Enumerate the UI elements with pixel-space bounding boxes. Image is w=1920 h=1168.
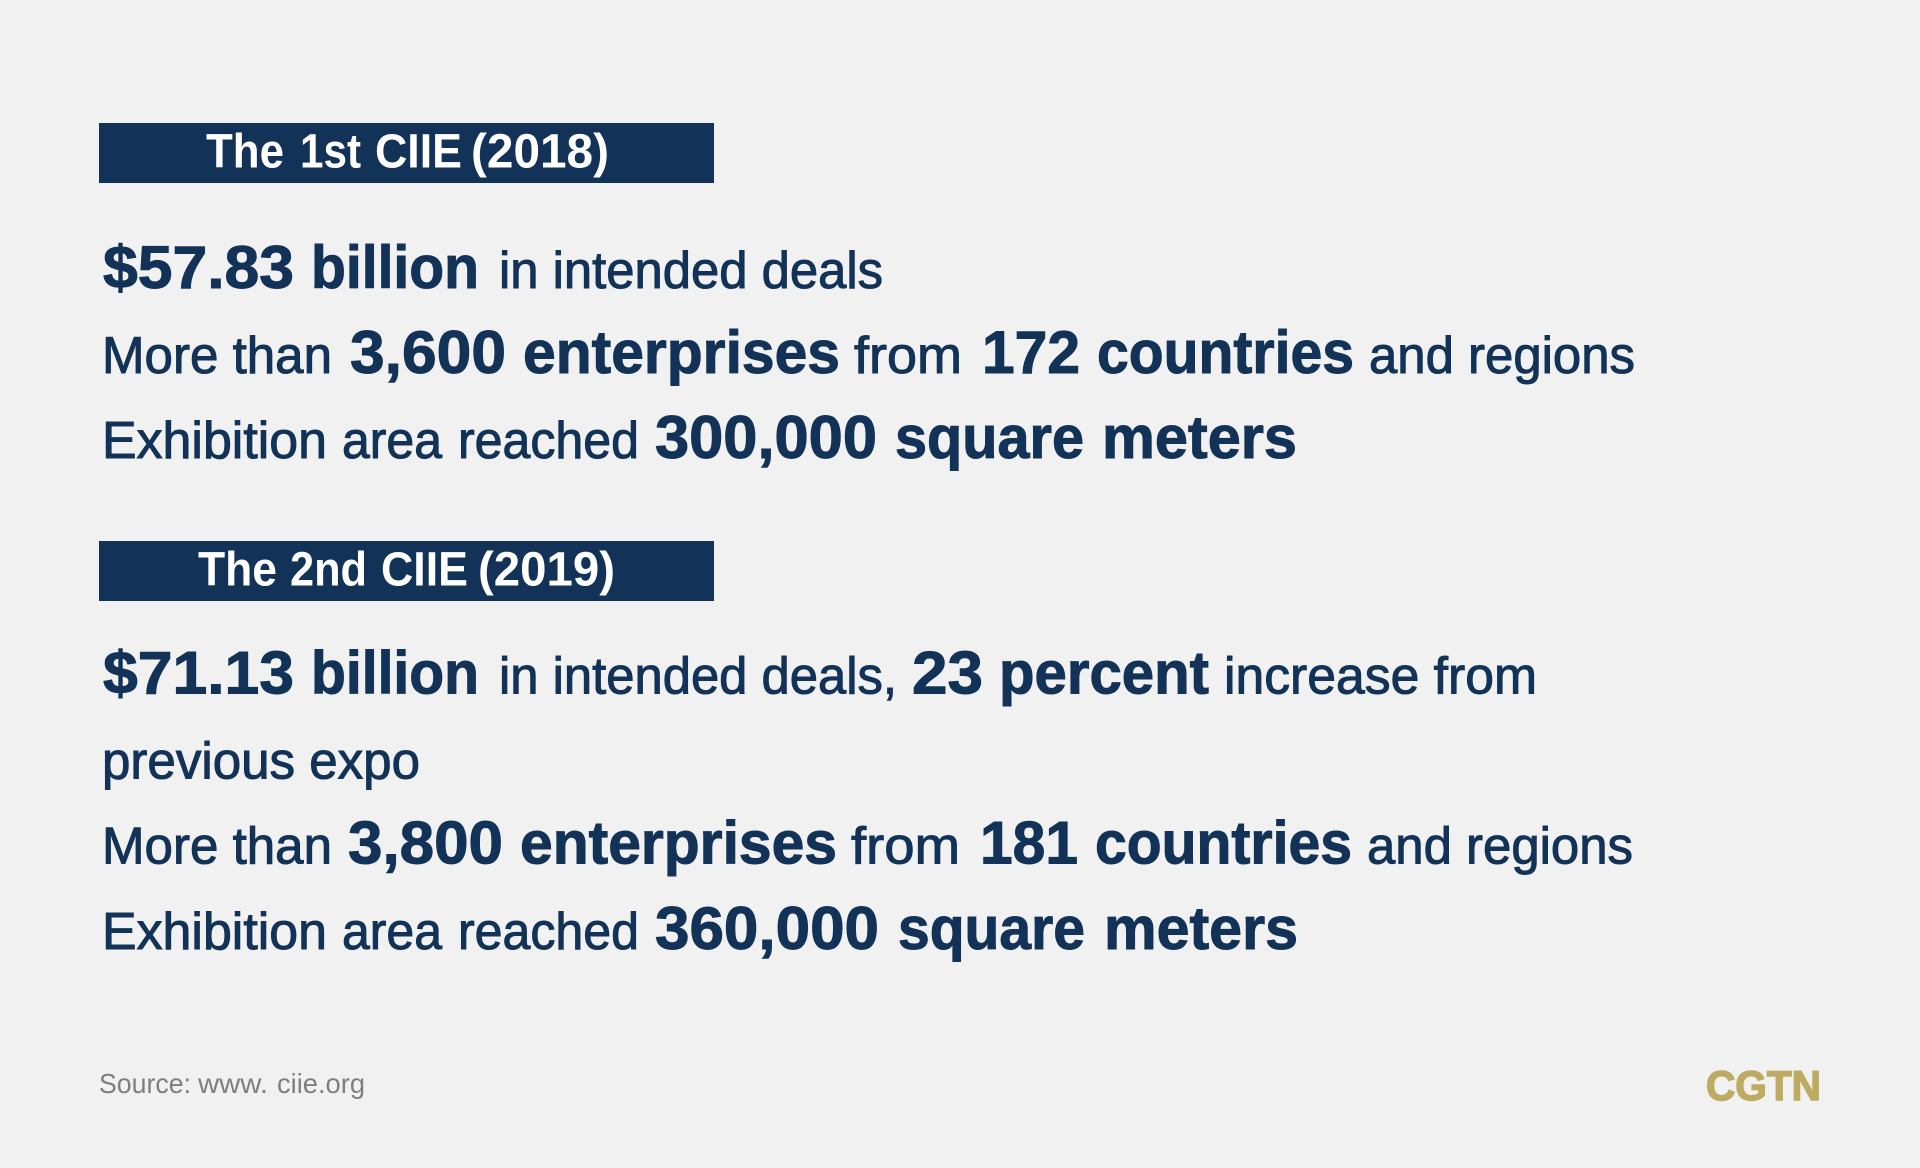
text line: 2019 exhibition area: Exhibition	[102, 903, 327, 961]
text line: 2019 exhibition area: square	[898, 895, 1085, 962]
source note: www.	[197, 1068, 268, 1099]
text line: 2019 intended deals	[103, 640, 1537, 706]
text line: 2018 exhibition area: square	[895, 404, 1084, 471]
text line: 2019 exhibition area	[102, 895, 1298, 962]
text line: 2018 exhibition area: area	[342, 412, 442, 470]
text line: 2019 intended deals: increase from	[1224, 648, 1537, 706]
text line: 2019 intended deals: in intended deals,	[499, 648, 897, 706]
text line: 2018 enterprises and countries	[102, 319, 1635, 386]
text line: 2018 intended deals	[103, 234, 883, 301]
text line: 2018 intended deals: billion	[311, 234, 479, 301]
heading bar: 1st CIIE	[99, 123, 714, 183]
text line: 2018 exhibition area: 300,000	[655, 404, 877, 471]
text line: 2019 enterprises and countries: countries	[1095, 810, 1352, 876]
source note: ciie.org	[277, 1068, 365, 1099]
heading bar: 2nd CIIE	[99, 541, 714, 601]
section: the 2nd CIIE (2019)	[99, 541, 1633, 962]
text line: 2019 intended deals: 23	[912, 640, 983, 706]
text line: 2019 enterprises and countries: 3,800	[348, 810, 503, 876]
source note: Source:	[99, 1068, 191, 1099]
heading bar: 2nd CIIE: 2nd	[290, 544, 367, 596]
text line: 2018 enterprises and countries: countries	[1097, 319, 1354, 386]
text line: 2019 intended deals: percent	[999, 640, 1209, 706]
text line: 2018 intended deals: $57.83	[103, 234, 294, 301]
text line: 2019 exhibition area: reached	[458, 903, 639, 961]
source note	[99, 1068, 365, 1099]
heading bar: 1st CIIE: CIIE	[375, 126, 462, 178]
text line: 2019 intended deals: $71.13	[103, 640, 294, 706]
text line: 2018 exhibition area: reached	[458, 412, 639, 470]
heading bar: 2nd CIIE: (2019)	[478, 544, 615, 596]
text line: 2019 enterprises and countries: from	[851, 818, 960, 876]
text line: 2019 exhibition area: meters	[1104, 895, 1298, 962]
heading bar: 1st CIIE: 1st	[300, 126, 361, 178]
heading bar: 1st CIIE: The	[206, 126, 284, 178]
text line: 2018 intended deals: in intended deals	[499, 242, 883, 300]
text line: 2018 exhibition area: meters	[1102, 404, 1297, 471]
text line: 2019 enterprises and countries: More than	[102, 818, 332, 876]
text line: 2019 exhibition area: 360,000	[655, 895, 879, 962]
text line: 2019 enterprises and countries	[102, 810, 1633, 876]
text line: 2018 enterprises and countries: 3,600	[350, 319, 506, 386]
text line: 2018 enterprises and countries: and regions	[1369, 327, 1635, 385]
text line: 2019 enterprises and countries: and regions	[1367, 818, 1633, 876]
text line: 2019 intended deals: billion	[311, 640, 479, 706]
heading bar: 2nd CIIE: The	[198, 544, 277, 596]
text line: 2018 exhibition area	[102, 404, 1297, 471]
text line: previous expo: previous expo	[102, 732, 420, 790]
logo: CGTN: CGTN	[1706, 1062, 1821, 1109]
text line: 2019 exhibition area: area	[342, 903, 442, 961]
section: the 1st CIIE (2018)	[99, 123, 1635, 471]
text line: 2018 exhibition area: Exhibition	[102, 412, 327, 470]
text line: 2018 enterprises and countries: 172	[982, 319, 1080, 386]
heading bar: 2nd CIIE: CIIE	[381, 544, 468, 596]
text line: 2019 enterprises and countries: 181	[980, 810, 1078, 876]
text line: 2019 enterprises and countries: enterprises	[520, 810, 837, 876]
text line: 2018 enterprises and countries: from	[854, 327, 962, 385]
text line: 2018 enterprises and countries: More than	[102, 327, 332, 385]
heading bar: 1st CIIE: (2018)	[471, 126, 609, 178]
text line: 2018 enterprises and countries: enterprises	[523, 319, 840, 386]
